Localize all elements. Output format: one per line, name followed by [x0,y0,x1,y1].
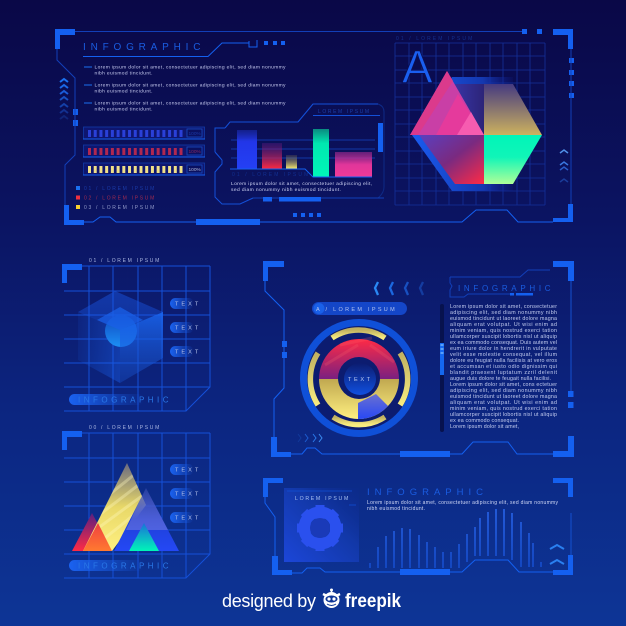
progress bars: 100% [188,131,202,137]
grid [64,266,210,411]
attribution: freepik [345,591,401,612]
text block: aliquam erat volutpat. Ut wisi enim ad [450,322,557,328]
panel: triangle chart [62,425,210,578]
text pills: TEXT [175,468,201,474]
hexagon [410,71,542,191]
text block: ullamcorper suscipit lobortis nisl ut aliquip [450,412,557,418]
text: Lorem ipsum dolor sit amet, consectetuer adipiscing elit, sed diam nonummy [367,500,558,506]
progress bars [83,127,205,175]
panel: donut and text [263,261,574,457]
bulleted text: nibh euismod tincidunt. [94,106,152,112]
heading: INFOGRAPHIC [367,487,488,498]
legend: 01 / LOREM IPSUM [84,186,156,192]
bulleted text: Lorem ipsum dolor sit amet, consectetuer adipiscing elit, sed diam nonummy [94,64,286,70]
panel: top dashboard [55,29,574,225]
icon: right chevrons [298,434,322,442]
scrollbar [440,304,444,432]
text block: blandit praesent luptatum zzril delenit [450,370,558,376]
panel: bar chart: LOREM IPSUM [318,109,371,115]
attribution [222,588,401,612]
pill label [312,302,407,315]
text [367,500,558,512]
triangles [72,463,179,551]
cube [78,291,163,383]
text block: velit esse molestie consequat, vel illum [450,352,558,358]
text pills [170,464,201,523]
panel: hexagon chart [395,36,568,205]
panel: hexagon chart: 01 / LOREM IPSUM [396,36,474,42]
header tag: INFOGRAPHIC [458,284,554,293]
label pill: INFOGRAPHIC [78,396,172,404]
text pills: TEXT [175,492,201,498]
text block: et accumsan et iusto odio dignissim qui [450,364,557,370]
text block: minim veniam, quis nostrud exerci tation [450,406,557,412]
pill label: A / LOREM IPSUM [316,307,397,313]
text block: Lorem ipsum dolor sit amet, cons ectetuer [450,382,557,388]
text block: euismod tincidunt ut laoreet dolore magna [450,316,557,322]
waveform [370,509,541,568]
icon: left chevrons [375,282,423,295]
icon: up chevrons [60,79,68,119]
text block: ex ea commodo consequat. [450,418,519,424]
text block: ex ea commodo consequat. Duis autem vel [450,340,557,346]
text block: adipiscing elit, sed diam nonummy nibh [450,310,557,316]
progress bars: 100% [188,149,202,155]
grid [395,43,545,205]
text block: Lorem ipsum dolor sit amet, [450,424,519,430]
panel: bar chart: 01 / LOREM IPSUM [232,172,310,178]
panel: bar chart: sed diam nonummy nibh euismod tincidunt. [231,187,341,193]
grid [64,433,210,578]
bulleted text: Lorem ipsum dolor sit amet, consectetuer adipiscing elit, sed diam nonummy [94,100,286,106]
legend [76,186,156,211]
donut chart: TEXT [348,377,373,383]
gear box: LOREM IPSUM [295,496,350,502]
text block: minim veniam, quis nostrud exerci tation [450,328,557,334]
frame [263,478,573,575]
gear box [284,488,359,562]
bulleted text [84,64,286,112]
text block: euismod tincidunt ut laoreet dolore magna [450,394,557,400]
icon: chevrons [550,545,564,564]
label pill: INFOGRAPHIC [78,562,172,570]
bulleted text: Lorem ipsum dolor sit amet, consectetuer adipiscing elit, sed diam nonummy [94,82,286,88]
text pills: TEXT [175,516,201,522]
panel: bar chart [215,104,384,204]
panel: bar chart: Lorem ipsum dolor sit amet, consectetuer adipiscing elit, [231,181,372,187]
text pills: TEXT [175,350,201,356]
text block: aliquam erat volutpat. Ut wisi enim ad [450,400,557,406]
letter A: A [402,41,433,93]
yellow arcs [310,330,408,425]
text pills [170,298,201,357]
panel frame [55,29,574,225]
panel: gear and waveform [263,478,573,575]
progress bars: 100% [188,167,202,173]
text block: augue duis dolore te feugait nulla facilisi. [450,376,551,382]
text block: ullamcorper suscipit lobortis nisl ut aliquip [450,334,557,340]
legend: 02 / LOREM IPSUM [84,196,156,202]
frame [263,261,574,457]
text block: dolore eu feugiat nulla facilisis at vero eros [450,358,557,364]
icon: freepik mascot [323,588,340,608]
text: nibh euismod tincidunt. [367,506,425,512]
attribution: designed by [222,591,316,611]
bars [237,129,372,177]
bulleted text: nibh euismod tincidunt. [94,70,152,76]
bulleted text: nibh euismod tincidunt. [94,88,152,94]
panel: triangle chart: 00 / LOREM IPSUM [89,425,161,431]
text pills: TEXT [175,326,201,332]
heading: INFOGRAPHIC [83,42,205,53]
legend: 03 / LOREM IPSUM [84,205,156,211]
panel: cube chart: 01 / LOREM IPSUM [89,258,161,264]
text block [450,304,558,430]
donut chart [304,322,414,434]
text block: Lorem ipsum dolor sit amet, consectetuer [450,304,557,310]
text block: adipiscing elit, sed diam nonummy nibh [450,388,557,394]
text block: eum iriure dolor in hendrerit in vulputate [450,346,557,352]
icon: chevrons [560,150,568,182]
icon: gear [297,505,343,551]
text pills: TEXT [175,302,201,308]
header tag [450,270,554,297]
panel: cube chart [62,258,210,411]
